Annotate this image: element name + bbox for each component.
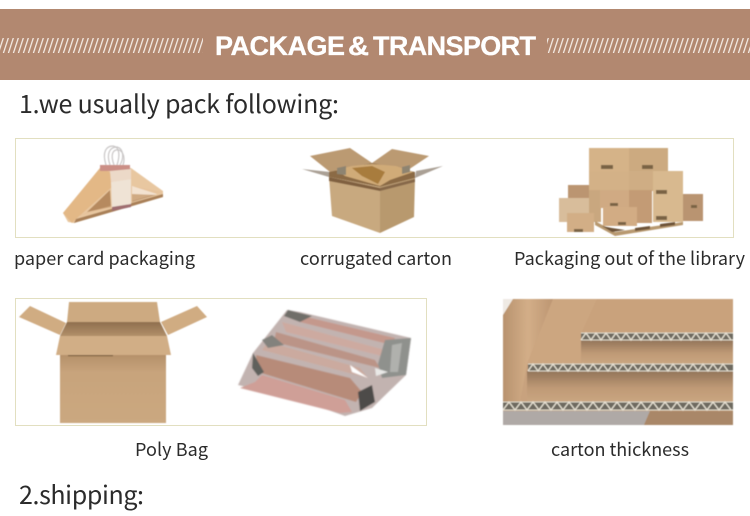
icon: poly bag of hangers xyxy=(238,310,411,416)
heading: shipping section: 2.shipping: xyxy=(19,476,144,512)
label: paper card packaging: paper card packaging xyxy=(14,245,195,271)
photo: corrugated cardboard sheets xyxy=(503,299,733,425)
icon: open corrugated carton xyxy=(302,148,443,233)
heading: packing section: 1.we usually pack following: xyxy=(19,85,339,121)
banner title: TRANSPORT xyxy=(373,31,536,61)
panel: top packaging row frame xyxy=(16,138,734,238)
banner title xyxy=(215,31,536,61)
banner title: & xyxy=(348,31,369,61)
label: corrugated carton: corrugated carton xyxy=(300,245,452,271)
icon: wooden hangers with paper card xyxy=(63,146,163,223)
icon: stacked cartons on pallet xyxy=(559,148,703,236)
banner title: PACKAGE xyxy=(215,31,345,61)
label: carton thickness: carton thickness xyxy=(551,436,689,462)
icon: open kraft box xyxy=(19,302,207,423)
label: poly bag: Poly Bag xyxy=(135,436,208,462)
banner xyxy=(0,9,750,80)
label: packaging out of the library: Packaging out of the library xyxy=(514,245,746,271)
panel: poly bag row frame xyxy=(16,298,426,426)
